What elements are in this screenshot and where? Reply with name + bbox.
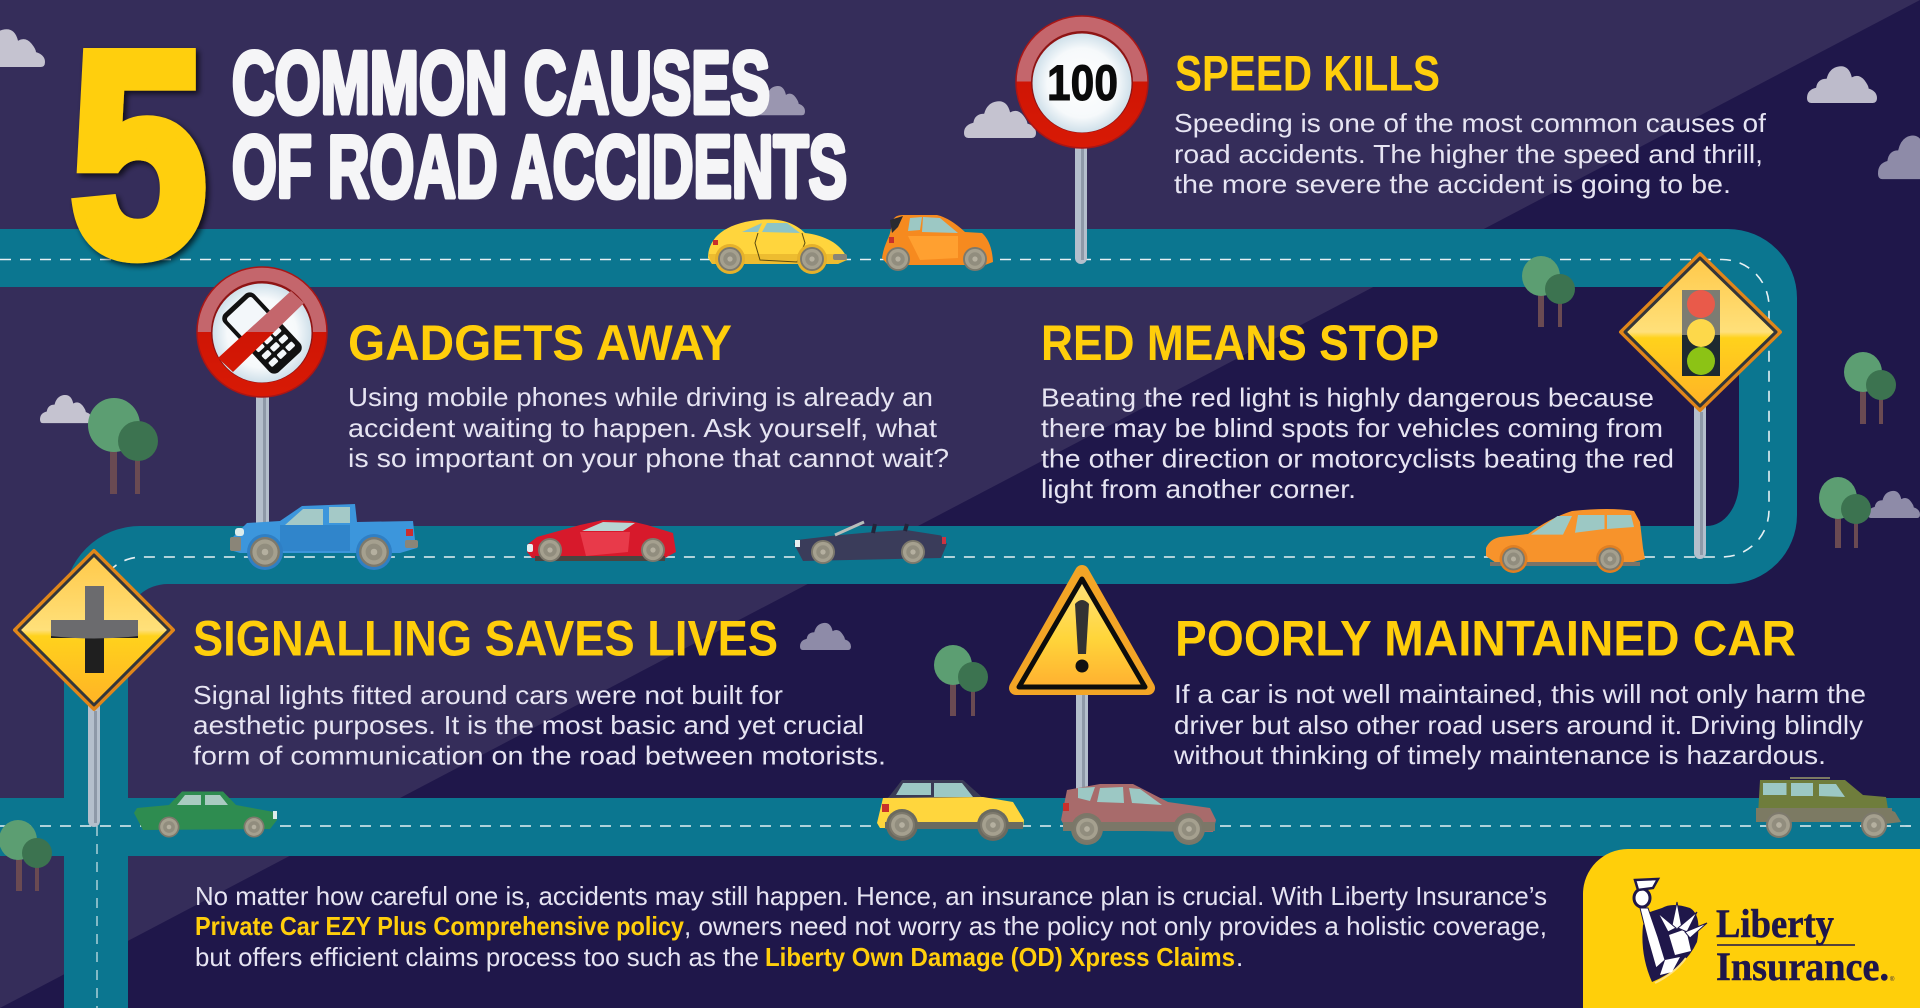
panel: red means stop: RED MEANS STOP xyxy=(1041,315,1439,371)
icon: statue of liberty xyxy=(1634,879,1707,983)
road: winding upper section xyxy=(0,229,1797,1008)
panel: poorly maintained car: POORLY MAINTAINED CAR xyxy=(1175,610,1796,666)
panel: signalling saves lives: aesthetic purposes. It is the most basic and yet crucial xyxy=(193,710,864,740)
car: dark convertible xyxy=(794,522,947,564)
panel: gadgets away: is so important on your phone that cannot wait? xyxy=(348,443,949,473)
car: brown suv xyxy=(1061,784,1216,845)
panel: speed kills: road accidents. The higher the speed and thrill, xyxy=(1174,139,1763,169)
panel: signalling saves lives: Signal lights fitted around cars were not built for xyxy=(193,680,783,710)
panel: red means stop: Beating the red light is highly dangerous because xyxy=(1041,382,1654,412)
tree pair: bottom left xyxy=(0,820,52,891)
panel: gadgets away: Using mobile phones while driving is already an xyxy=(348,382,933,412)
panel: logo xyxy=(1583,849,1920,1008)
panel: speed kills: the more severe the accident is going to be. xyxy=(1174,169,1731,199)
closing paragraph: Liberty Own Damage (OD) Xpress Claims xyxy=(765,942,1235,972)
panel: signalling saves lives xyxy=(193,610,886,770)
road markings xyxy=(0,260,1920,1008)
clouds xyxy=(0,29,1920,650)
closing paragraph: . xyxy=(1236,942,1243,972)
icon: exclamation mark xyxy=(1075,600,1089,672)
car: yellow beetle xyxy=(708,219,847,274)
panel: poorly maintained car xyxy=(1173,610,1866,770)
tree pair: right xyxy=(1844,352,1896,424)
logo wordmark: ® xyxy=(1890,976,1895,983)
panel: red means stop: there may be blind spots for vehicles coming from xyxy=(1041,413,1663,443)
icon: crossroad xyxy=(51,586,138,673)
panel: speed kills: SPEED KILLS xyxy=(1175,46,1440,102)
sign: crossroad diamond xyxy=(15,551,173,827)
trees xyxy=(0,256,1896,891)
panel: speed kills: Speeding is one of the most common causes of xyxy=(1174,108,1767,138)
panel: red means stop: light from another corner. xyxy=(1041,474,1356,504)
panel: gadgets away xyxy=(348,315,949,473)
panel: red means stop: the other direction or motorcyclists beating the red xyxy=(1041,444,1674,474)
car: blue pickup xyxy=(230,504,418,570)
logo wordmark xyxy=(1716,901,1895,989)
panel: speed kills xyxy=(1174,46,1767,199)
closing paragraph: but offers efficient claims process too such as the xyxy=(195,942,759,972)
panel: signalling saves lives: form of communication on the road between motorists. xyxy=(193,740,886,770)
title: big number 5: 5 xyxy=(70,0,207,316)
road: lower straight section xyxy=(0,798,1920,856)
sign: traffic light diamond xyxy=(1621,254,1780,559)
panel: poorly maintained car: If a car is not well maintained, this will not only harm the xyxy=(1174,679,1866,709)
panel: red means stop xyxy=(1041,315,1674,504)
title: heading: OF ROAD ACCIDENTS xyxy=(232,117,847,216)
sign: warning triangle xyxy=(1016,572,1148,790)
logo wordmark: Insurance. xyxy=(1716,944,1889,989)
car: orange minivan xyxy=(1486,509,1645,573)
car: red sports car xyxy=(527,520,676,562)
icon: phone xyxy=(219,289,305,377)
title: heading xyxy=(232,33,847,216)
panel: signalling saves lives: SIGNALLING SAVES LIVES xyxy=(193,610,778,666)
car: green jeep xyxy=(1756,778,1901,838)
sign: speed limit 100 xyxy=(1016,16,1148,264)
tree pair: upper right road xyxy=(1522,256,1575,327)
car: green sedan xyxy=(134,792,277,838)
panel: poorly maintained car: driver but also other road users around it. Driving blindly xyxy=(1174,710,1863,740)
panel: gadgets away: GADGETS AWAY xyxy=(348,315,732,371)
tree pair: left xyxy=(88,398,158,494)
closing paragraph: Private Car EZY Plus Comprehensive policy xyxy=(195,911,684,941)
panel: gadgets away: accident waiting to happen. Ask yourself, what xyxy=(348,413,938,443)
tree pair: centre xyxy=(934,645,988,716)
sign: no mobile phones xyxy=(197,267,327,526)
car: orange smart xyxy=(882,215,993,271)
icon: traffic light xyxy=(1682,290,1720,376)
car: yellow mini xyxy=(877,780,1024,841)
closing paragraph: No matter how careful one is, accidents may still happen. Hence, an insurance plan is crucial. With Liberty Insurance’s xyxy=(195,881,1547,911)
title: heading: COMMON CAUSES xyxy=(232,33,770,132)
sign: speed limit 100: 100 xyxy=(1047,55,1118,111)
panel: poorly maintained car: without thinking of timely maintenance is hazardous. xyxy=(1173,740,1826,770)
closing paragraph xyxy=(195,881,1547,972)
closing paragraph: , owners need not worry as the policy not only provides a holistic coverage, xyxy=(684,911,1547,941)
tree pair: lower right xyxy=(1819,477,1871,548)
logo wordmark: Liberty xyxy=(1716,901,1834,946)
